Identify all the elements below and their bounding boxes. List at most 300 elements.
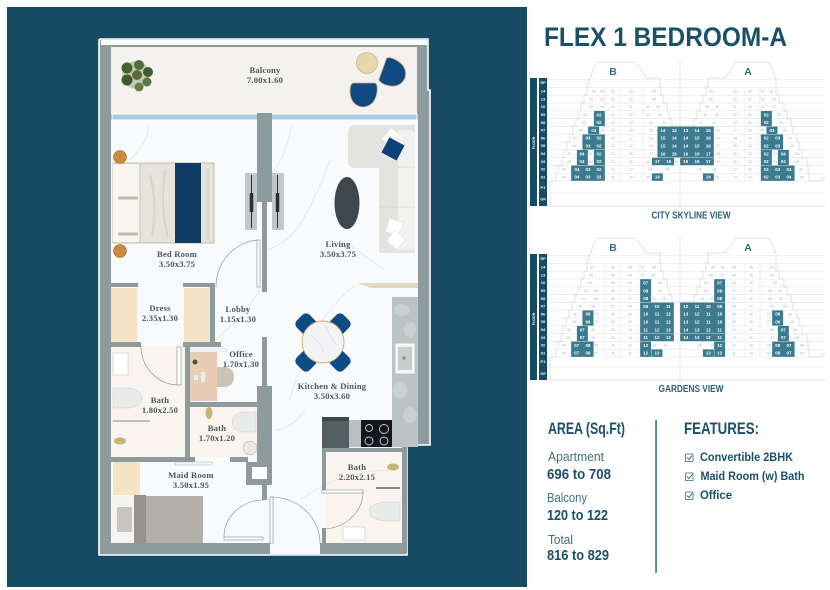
highlighted unit numbers: 07 [580,327,585,332]
unit numbers grey: 05 [790,320,794,324]
unit numbers grey: 07 [595,312,599,316]
unit numbers grey: 03 [582,121,586,125]
unit numbers grey: 15 [629,175,633,179]
apartment label: Apartment [548,450,605,464]
highlighted unit numbers: 11 [717,335,723,340]
unit numbers grey: 10 [611,344,615,348]
unit numbers grey: 09 [652,90,656,94]
floor numbers: 01 [541,350,546,355]
room labels: Bath [208,423,226,433]
unit numbers grey: 06 [793,328,797,332]
unit numbers grey: 02 [600,105,604,109]
unit numbers grey: 01 [748,152,752,156]
highlighted unit numbers: 13 [666,327,671,332]
floor numbers: 13 [541,96,546,101]
chart: city skyline view [530,62,825,222]
unit numbers grey: 01 [748,136,752,140]
highlighted unit numbers: 13 [672,128,677,133]
highlighted unit numbers: 16 [706,136,711,141]
floor numbers [540,80,546,202]
floor numbers: 14 [541,88,546,94]
unit numbers grey: 10 [611,351,615,355]
unit numbers grey: 04 [788,136,792,140]
unit numbers grey: 10 [662,297,666,301]
unit numbers grey: 09 [709,90,713,94]
unit numbers grey: 01 [611,105,615,109]
tower labels: B [609,66,617,78]
highlighted unit numbers: 12 [717,343,723,348]
highlighted unit numbers: 02 [764,120,769,125]
unit numbers grey: 09 [628,320,632,324]
highlighted unit numbers: 14 [683,327,689,332]
floor numbers: 01 [541,174,546,179]
coffee table [334,177,360,229]
unit numbers grey: 11 [646,113,650,117]
unit numbers grey: 01 [748,105,752,109]
highlighted unit numbers: 09 [643,304,649,309]
highlighted unit numbers: 11 [706,312,711,317]
unit numbers grey: 04 [589,273,593,277]
highlighted unit numbers: 04 [781,159,786,164]
unit numbers grey: 04 [773,281,777,285]
left bath fixtures [113,353,150,444]
unit numbers grey: 16 [648,168,652,172]
interior walls [111,113,407,553]
room labels: 2.20x2.15 [339,472,375,482]
unit numbers grey: 01 [611,160,615,164]
unit numbers grey: 09 [705,105,709,109]
window line [112,114,417,120]
unit numbers grey: 09 [732,320,736,324]
unit numbers grey: 06 [611,297,615,301]
unit numbers grey: 05 [799,168,803,172]
room labels: 1.80x2.50 [142,405,178,415]
unit numbers grey: 01 [748,97,752,101]
unit numbers grey: 17 [716,136,720,140]
floor numbers: 02 [541,167,546,172]
unit numbers grey: 06 [795,336,799,340]
unit numbers grey: 15 [649,129,653,133]
unit numbers grey: 02 [761,97,765,101]
highlighted unit numbers: 02 [597,167,602,172]
chart: gardens view [530,238,825,395]
dining set [293,311,353,374]
highlighted unit numbers: 12 [695,312,700,317]
unit numbers grey: 08 [652,266,656,270]
floor numbers: GF [540,371,546,376]
dress wardrobes [111,288,210,495]
highlighted unit numbers: 09 [717,304,723,309]
unit numbers grey: 15 [646,175,650,179]
floor numbers: GF [540,196,546,202]
unit numbers grey: 05 [768,289,772,293]
floor bar [530,78,537,206]
highlighted unit numbers: 12 [695,320,700,324]
feature: office: Office [700,488,732,502]
unit numbers grey: 07 [732,289,736,293]
highlighted unit numbers: 02 [764,112,769,117]
unit numbers grey: 06 [732,281,736,285]
highlighted unit numbers: 12 [655,327,660,332]
highlighted unit numbers: 10 [717,320,723,324]
top white strip [101,40,427,45]
highlighted unit numbers: 08 [717,296,723,301]
unit numbers grey: 09 [594,344,598,348]
unit numbers grey: 07 [721,266,725,270]
highlighted unit numbers: 02 [597,151,602,156]
highlighted unit numbers: 08 [586,343,591,348]
kitchen counter mottling [393,304,417,423]
highlighted unit numbers: 03 [775,144,781,148]
highlighted unit numbers: 10 [655,304,660,309]
unit numbers grey: 01 [748,129,752,133]
highlighted unit numbers: 03 [586,144,591,148]
row grid [547,256,825,380]
unit numbers grey: 08 [658,281,662,285]
unit numbers grey: 09 [611,328,615,332]
unit numbers grey: 04 [572,144,576,148]
unit numbers grey: 09 [594,351,598,355]
room labels: 1.70x1.20 [199,433,235,443]
unit numbers grey: 01 [611,121,615,125]
unit numbers grey: 11 [628,344,632,348]
panel: area [547,420,625,564]
unit numbers grey: 12 [733,113,737,117]
unit numbers grey: 04 [582,297,586,301]
highlighted unit numbers: 07 [643,280,649,286]
unit numbers grey: 07 [721,273,725,277]
highlighted unit numbers: 11 [655,312,660,317]
unit numbers grey: 11 [629,105,633,109]
stove [361,420,392,447]
highlighted unit numbers: 10 [643,312,649,317]
highlighted unit numbers: 14 [695,128,700,133]
unit numbers grey: 10 [629,90,633,94]
unit numbers grey: 05 [749,273,753,277]
unit numbers grey: 02 [761,90,765,94]
unit numbers grey: 04 [590,266,594,270]
unit numbers grey: 09 [767,344,771,348]
unit numbers grey: 06 [749,289,753,293]
unit numbers grey: 09 [652,297,656,301]
floor numbers: 05 [541,143,546,148]
unit numbers grey: 08 [611,312,615,316]
unit numbers grey: 05 [572,320,576,324]
balcony label: Balcony [547,491,588,505]
unit numbers grey: 03 [592,90,596,94]
unit numbers grey: 13 [733,121,737,125]
unit numbers grey: 04 [779,297,783,301]
unit numbers grey: 11 [662,121,666,125]
floor numbers: 04 [541,151,546,156]
unit numbers grey: 09 [709,97,713,101]
room labels: 1.15x1.30 [220,314,256,324]
unit numbers grey: 06 [628,273,632,277]
unit numbers grey: 10 [629,97,633,101]
entrance opening [270,543,320,554]
highlighted unit numbers: 12 [706,327,711,332]
unit numbers grey: 13 [652,344,656,348]
floor label column [539,78,547,206]
highlighted unit numbers: 11 [666,304,671,309]
highlighted unit numbers: 11 [695,304,700,309]
row grid [547,80,825,206]
highlighted unit numbers: 16 [695,151,700,156]
highlighted unit numbers: 08 [717,288,723,293]
unit numbers grey: 05 [567,160,571,164]
highlighted unit numbers: 14 [706,175,711,180]
unit numbers grey: 08 [770,336,774,340]
floor numbers: 10 [541,104,546,109]
floor numbers [540,256,546,376]
unit numbers grey: 04 [783,129,787,133]
tower labels: A [744,242,752,254]
highlighted unit numbers: 12 [643,351,649,356]
maid room bed [112,495,203,544]
floor numbers: 03 [541,159,546,164]
unit numbers grey: 04 [584,289,588,293]
nightstands [114,150,126,258]
unit numbers grey: 05 [567,152,571,156]
highlighted unit numbers: 02 [597,159,602,164]
unit numbers grey: 09 [749,328,753,332]
unit numbers grey: 06 [591,305,595,309]
unit numbers grey: 10 [733,90,737,94]
unit numbers grey: 10 [658,113,662,117]
highlighted unit numbers: 06 [775,312,781,317]
bathroom floors [111,347,402,543]
interior marble floor [111,120,418,543]
floor numbers: 07 [541,304,546,309]
unit numbers grey: 06 [732,266,736,270]
unit numbers grey: 19 [629,160,633,164]
highlighted unit numbers: 07 [781,335,786,340]
highlighted unit numbers: 07 [580,335,585,340]
highlighted unit numbers: 02 [764,144,769,148]
unit numbers grey: 08 [591,336,595,340]
room labels [142,65,375,490]
title: FLEX 1 BEDROOM-A [544,22,787,52]
total label: Total [548,533,573,547]
unit numbers grey: 01 [611,152,615,156]
highlighted unit numbers: 04 [787,167,792,172]
floor numbers: 06 [541,311,546,316]
unit numbers grey: 06 [628,281,632,285]
unit numbers grey: 18 [646,160,650,164]
unit numbers grey: 01 [748,90,752,94]
unit numbers grey: 01 [748,113,752,117]
floor label column [539,254,547,380]
unit numbers grey: 15 [674,160,678,164]
highlighted unit numbers: 08 [775,351,781,356]
room labels: 3.50x3.75 [320,249,356,259]
highlighted unit numbers: 11 [717,327,723,332]
floor numbers: 04 [541,327,546,332]
unit numbers grey: 08 [711,266,715,270]
highlighted unit numbers: 15 [661,144,666,148]
floor numbers: 08 [541,120,546,125]
unit numbers grey: 01 [748,160,752,164]
kitchen lower counter [349,420,361,447]
unit numbers grey: 03 [772,97,776,101]
highlighted unit numbers: 12 [683,304,689,309]
highlighted unit numbers: 16 [683,159,689,164]
floor numbers: RF [540,256,546,261]
unit numbers grey: 17 [629,144,633,148]
marble veins [130,125,395,500]
highlighted unit numbers: 11 [655,320,660,324]
unit numbers grey: 05 [795,152,799,156]
bed [113,163,214,243]
balcony plant [122,60,153,92]
unit numbers grey: 10 [703,113,707,117]
floor numbers: 09 [541,112,546,117]
unit numbers grey: 10 [733,97,737,101]
unit numbers grey: 06 [628,266,632,270]
features heading: FEATURES: [684,420,759,438]
unit numbers grey: 03 [588,160,592,164]
unit numbers grey: 04 [573,136,577,140]
office chair [217,367,234,387]
unit numbers grey: 17 [716,144,720,148]
highlighted unit numbers: 08 [775,343,781,348]
unit numbers grey: 17 [629,136,633,140]
unit numbers grey: 17 [733,168,737,172]
highlighted unit numbers: 14 [672,144,677,148]
highlighted unit numbers: 13 [683,128,689,133]
unit numbers grey [562,90,804,179]
unit numbers grey: 07 [767,320,771,324]
unit numbers grey: 15 [715,175,719,179]
room labels: Dress [149,303,171,313]
unit numbers grey: 06 [749,297,753,301]
unit numbers grey: 02 [600,90,604,94]
unit numbers grey: 06 [562,344,566,348]
unit numbers grey: 13 [710,344,714,348]
unit numbers grey: 14 [698,344,702,348]
highlighted unit numbers: 04 [580,159,585,164]
floor numbers: P1 [541,359,546,364]
unit numbers grey: 05 [578,305,582,309]
unit numbers grey: 16 [649,136,653,140]
highlighted unit numbers: 07 [787,351,792,356]
unit numbers grey: 11 [732,351,736,355]
unit numbers grey: 16 [716,129,720,133]
unit numbers grey: 09 [710,297,714,301]
highlighted unit numbers [575,112,792,180]
unit numbers grey: 09 [652,97,656,101]
unit numbers grey: 06 [800,351,804,355]
highlighted unit numbers: 13 [706,351,711,356]
floor numbers: 05 [541,319,546,324]
unit numbers grey: 05 [611,266,615,270]
unit numbers grey: 01 [611,113,615,117]
unit numbers grey: 08 [628,305,632,309]
room labels: Bath [348,462,366,472]
unit numbers grey: 16 [712,168,716,172]
highlighted units [571,111,795,181]
unit numbers grey: 18 [733,144,737,148]
unit numbers grey: 03 [779,121,783,125]
unit numbers grey: 03 [769,90,773,94]
unit numbers grey: 09 [749,336,753,340]
unit numbers grey: 01 [748,168,752,172]
unit numbers grey: 19 [733,160,737,164]
balcony value: 120 to 122 [547,507,608,524]
unit numbers grey: 02 [600,129,604,133]
plan outline [99,39,430,555]
unit numbers grey: 10 [715,105,719,109]
highlighted unit numbers: 13 [695,327,700,332]
highlighted unit numbers: 14 [655,175,660,180]
highlighted unit numbers: 02 [764,136,769,141]
unit numbers grey: 02 [761,105,765,109]
unit numbers grey: 03 [589,97,593,101]
unit numbers grey: 07 [732,297,736,301]
room labels: 3.50x3.75 [159,259,195,269]
right bath fixtures [343,464,400,540]
highlighted unit numbers: 06 [586,312,591,317]
apartment value: 696 to 708 [547,466,611,483]
floor numbers: 08 [541,296,546,301]
oven unit [322,417,349,448]
room labels: Maid Room [168,470,214,480]
unit numbers grey: 16 [649,144,653,148]
unit numbers grey [562,266,804,355]
unit numbers grey: 07 [641,266,645,270]
tower labels: B [609,242,617,254]
unit numbers grey: 10 [628,336,632,340]
highlighted unit numbers: 12 [666,320,671,324]
unit numbers grey: 03 [773,152,777,156]
highlighted unit numbers: 04 [787,175,792,180]
highlighted unit numbers: 14 [661,128,666,133]
room labels: Lobby [226,304,251,314]
unit numbers grey: 05 [594,297,598,301]
unit numbers grey: 12 [629,113,633,117]
unit numbers grey: 02 [600,97,604,101]
unit numbers grey: 11 [699,121,703,125]
highlighted unit numbers: 10 [643,320,649,324]
highlighted unit numbers: 06 [775,320,781,324]
unit numbers grey: 08 [651,273,655,277]
highlighted unit numbers: 03 [770,128,775,133]
total value: 816 to 829 [547,547,609,564]
unit numbers grey: 10 [749,351,753,355]
highlighted unit numbers: 12 [655,335,660,340]
highlighted unit numbers: 14 [683,136,689,141]
highlighted unit numbers: 12 [643,343,649,348]
highlighted unit numbers: 17 [706,151,711,156]
shaft [252,467,267,479]
gardens caption: GARDENS VIEW [658,383,724,395]
unit numbers grey: 02 [761,129,765,133]
balcony floor [111,47,417,114]
highlighted unit numbers: 16 [661,151,666,156]
unit numbers grey: 08 [709,273,713,277]
unit numbers grey: 09 [656,105,660,109]
highlighted unit numbers: 07 [781,327,786,332]
unit numbers grey: 14 [733,175,737,179]
unit numbers grey: 06 [732,273,736,277]
highlighted unit numbers: 11 [643,327,649,332]
unit numbers grey: 05 [594,289,598,293]
unit numbers grey: 03 [777,113,781,117]
highlighted unit numbers: 13 [683,312,689,317]
unit numbers grey: 01 [611,136,615,140]
unit numbers grey: 11 [732,344,736,348]
unit numbers grey: 03 [588,152,592,156]
